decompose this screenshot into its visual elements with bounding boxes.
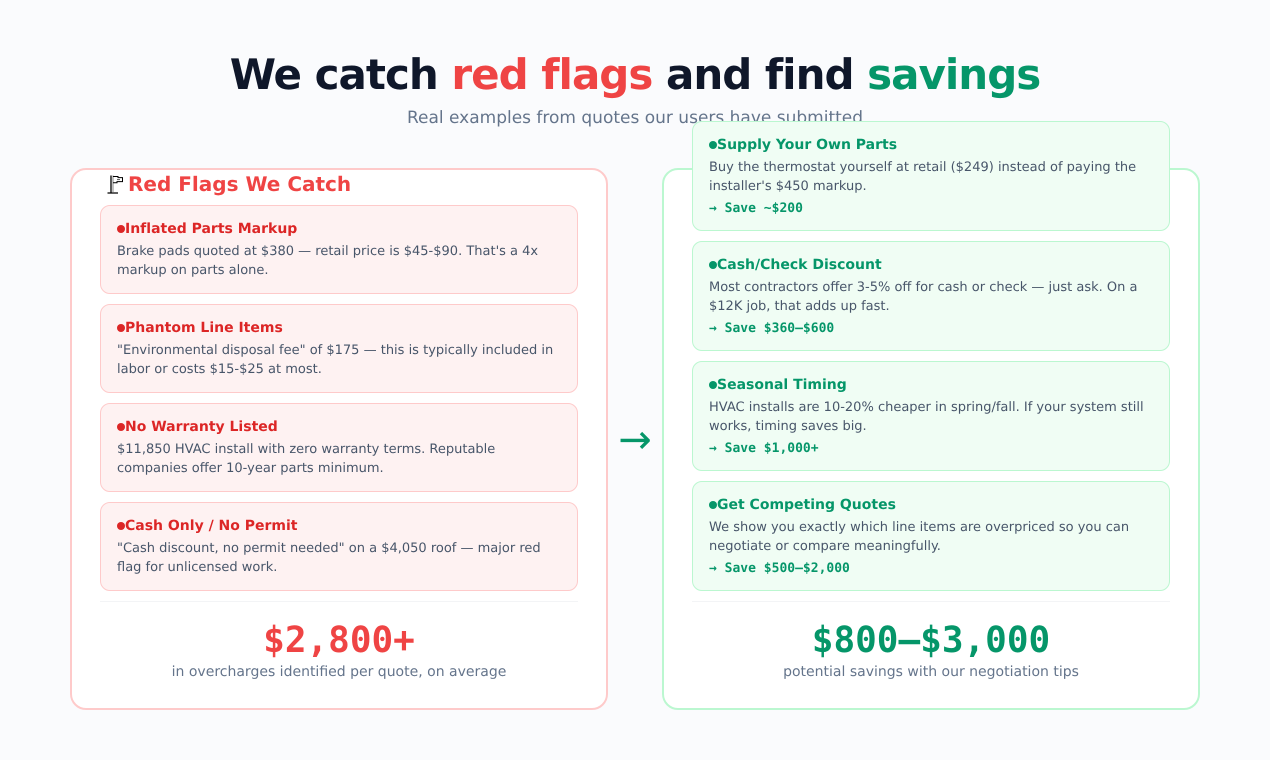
icon: flag: [108, 176, 123, 194]
card: get competing quotes: We show you exactly which line items are overpriced so you can: [709, 520, 1129, 535]
card: seasonal timing: [692, 361, 1170, 471]
card: supply your own parts: installer's $450 markup.: [709, 179, 867, 194]
card: phantom line items: [100, 304, 578, 393]
card: seasonal timing: works, timing saves big.: [709, 419, 867, 434]
card: seasonal timing: Seasonal Timing: [717, 377, 847, 393]
stat: overcharges: $2,800+: [263, 620, 415, 661]
card: phantom line items: labor or costs $15-$25 at most.: [117, 362, 322, 377]
stat caption: overcharges: in overcharges identified per quote, on average: [172, 664, 506, 680]
card: get competing quotes: Get Competing Quotes: [717, 497, 896, 513]
card: seasonal timing: → Save $1,000+: [709, 441, 819, 456]
card: no warranty listed: $11,850 HVAC install with zero warranty terms. Reputable: [117, 442, 495, 457]
card: cash only no permit: flag for unlicensed work.: [117, 560, 277, 575]
card: supply your own parts: Buy the thermostat yourself at retail ($249) instead of paying the: [709, 160, 1136, 175]
stat: savings: $800–$3,000: [812, 620, 1050, 661]
card: seasonal timing: HVAC installs are 10-20% cheaper in spring/fall. If your system still: [709, 400, 1144, 415]
panel: savings: [662, 168, 1200, 710]
card: cash/check discount: → Save $360–$600: [709, 321, 834, 336]
card: no warranty listed: companies offer 10-year parts minimum.: [117, 461, 384, 476]
panel heading: red flags: Red Flags We Catch: [128, 172, 351, 196]
card: inflated parts markup: [100, 205, 578, 294]
title: We catch red flags and find savings: [230, 50, 1040, 99]
card: get competing quotes: negotiate or compare meaningfully.: [709, 539, 941, 554]
card: cash/check discount: $12K job, that adds up fast.: [709, 299, 890, 314]
card: cash/check discount: Most contractors offer 3-5% off for cash or check — just ask. On a: [709, 280, 1138, 295]
stat caption: savings: potential savings with our negotiation tips: [783, 664, 1079, 680]
panel: red flags: [70, 168, 608, 710]
card: cash/check discount: [692, 241, 1170, 351]
card: get competing quotes: [692, 481, 1170, 591]
card: cash only no permit: Cash Only / No Permit: [125, 518, 298, 534]
card: inflated parts markup: markup on parts alone.: [117, 263, 269, 278]
card: supply your own parts: [692, 121, 1170, 231]
card: supply your own parts: Supply Your Own Parts: [717, 137, 897, 153]
card: phantom line items: "Environmental disposal fee" of $175 — this is typically included in: [117, 343, 553, 358]
card: no warranty listed: [100, 403, 578, 492]
card: inflated parts markup: Inflated Parts Markup: [125, 221, 297, 237]
card: cash/check discount: Cash/Check Discount: [717, 257, 882, 273]
card: supply your own parts: → Save ~$200: [709, 201, 803, 216]
card: cash only no permit: [100, 502, 578, 591]
card: cash only no permit: "Cash discount, no permit needed" on a $4,050 roof — major red: [117, 541, 541, 556]
card: get competing quotes: → Save $500–$2,000: [709, 561, 850, 576]
subtitle: Real examples from quotes our users have submitted: [407, 108, 863, 128]
card: inflated parts markup: Brake pads quoted at $380 — retail price is $45-$90. That's a 4x: [117, 244, 538, 259]
card: no warranty listed: No Warranty Listed: [125, 419, 278, 435]
card: phantom line items: Phantom Line Items: [125, 320, 283, 336]
arrow: →: [618, 417, 652, 463]
